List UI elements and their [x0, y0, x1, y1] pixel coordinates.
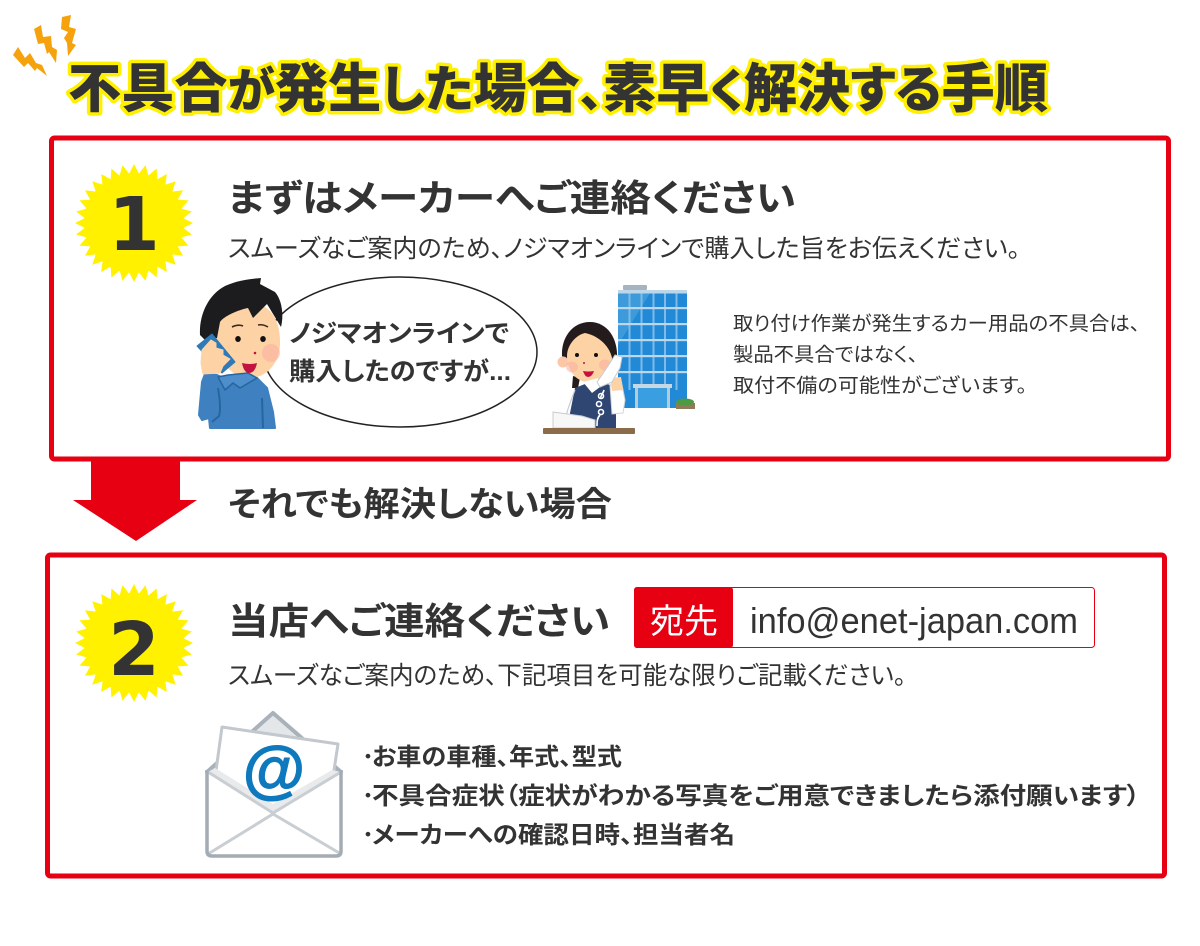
illustration: office building	[618, 285, 695, 409]
side note	[733, 313, 1140, 397]
bullet list: ･	[362, 822, 374, 849]
speech bubble: 購入したのですが...	[289, 357, 511, 386]
illustration: receptionist on phone	[543, 322, 635, 434]
illustration: man on phone	[197, 278, 282, 428]
panel: step 1	[52, 138, 1168, 459]
side note: 製品不具合ではなく、	[733, 344, 918, 366]
badge: number 1	[68, 157, 200, 289]
email address tag: 宛先	[650, 603, 718, 641]
speech bubble: ノジマオンラインで	[289, 320, 509, 348]
side note: 取り付け作業が発生するカー用品の不具合は、	[733, 313, 1140, 335]
icon: lightning bolts	[13, 15, 76, 76]
step 2 description: スムーズなご案内のため、下記項目を可能な限りご記載ください。	[228, 662, 906, 690]
icon: open envelope with at sign	[207, 713, 341, 856]
step 2 heading: 当店へご連絡ください	[228, 601, 610, 642]
bullet list: 不具合症状（症状がわかる写真をご用意できましたら添付願います）	[372, 782, 1140, 810]
side note: 取付不備の可能性がございます。	[733, 374, 1027, 397]
bullet list	[362, 744, 1140, 849]
icon: open envelope with at sign: @	[243, 733, 305, 805]
bullet list: メーカーへの確認日時、担当者名	[372, 822, 735, 849]
title: 不具合が発生した場合、素早く解決する手順	[68, 60, 1048, 119]
email address tag	[634, 587, 1094, 648]
badge: number 2: 2	[108, 607, 160, 693]
badge: number 1: 1	[108, 182, 160, 268]
email address tag: info@enet-japan.com	[750, 600, 1078, 641]
bullet list: お車の車種、年式、型式	[372, 744, 622, 771]
badge: number 2	[68, 577, 200, 709]
speech bubble	[263, 277, 537, 427]
step 1 description: スムーズなご案内のため、ノジマオンラインで購入した旨をお伝えください。	[228, 235, 1020, 263]
bullet list: ･	[362, 783, 374, 810]
connector text: それでも解決しない場合	[228, 486, 612, 524]
arrow: down	[73, 461, 197, 541]
bullet list: ･	[362, 744, 374, 771]
step 1 heading: まずはメーカーへご連絡ください	[228, 178, 796, 219]
panel: step 2	[48, 555, 1164, 876]
